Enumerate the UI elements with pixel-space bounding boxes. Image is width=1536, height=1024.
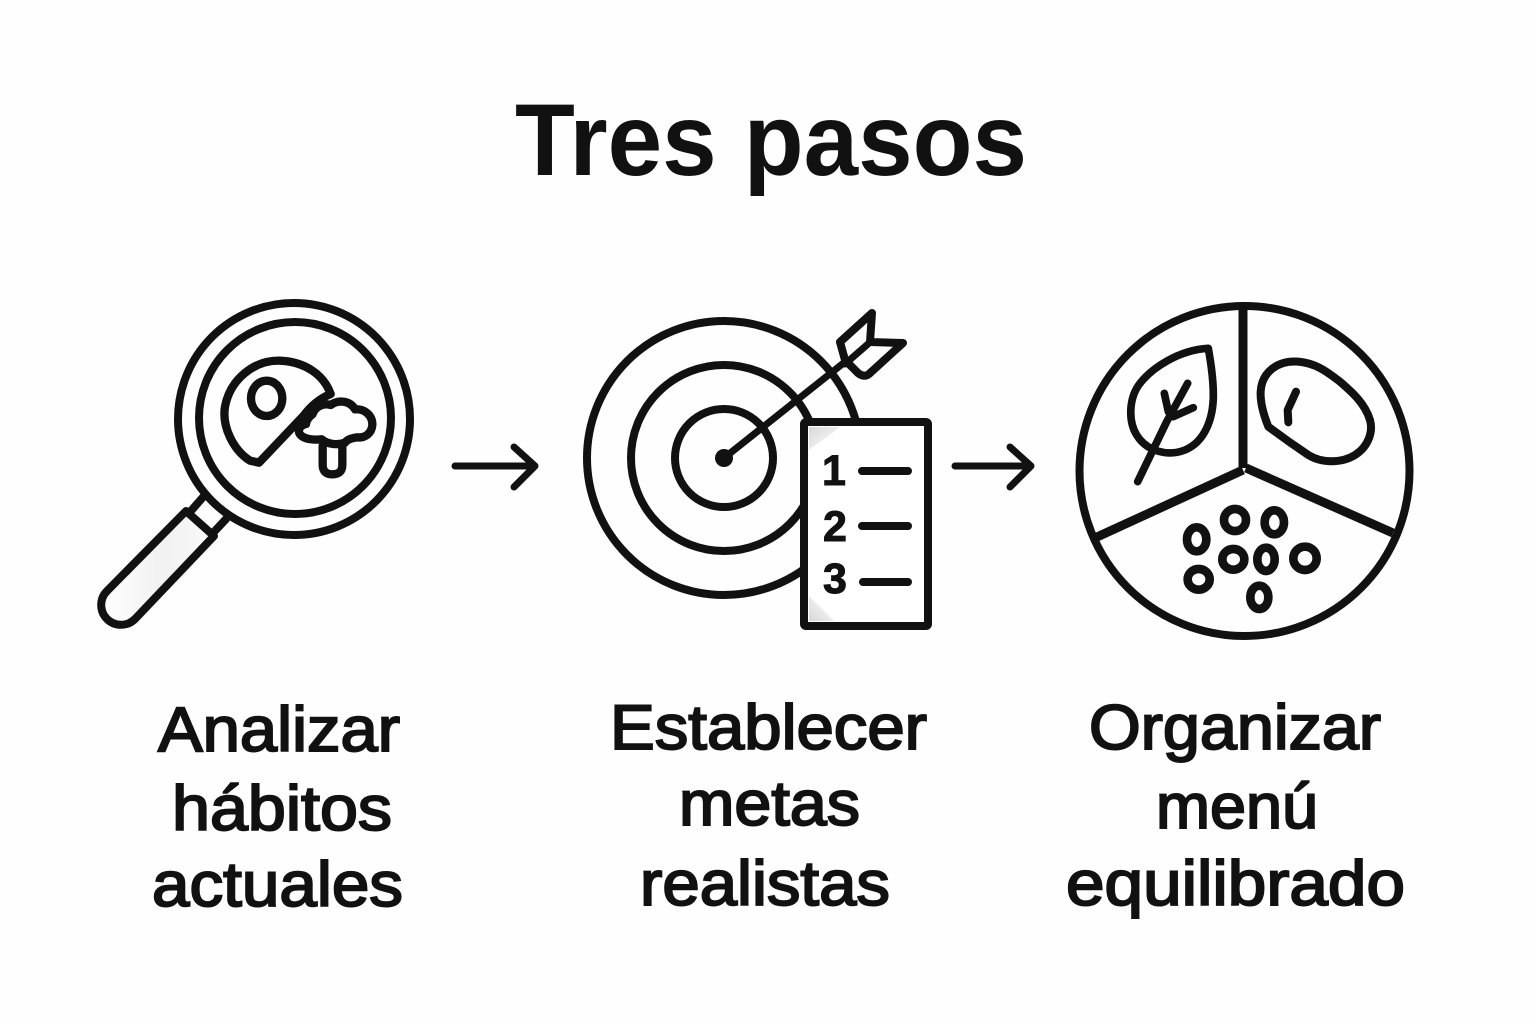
label: step 2: Establecer xyxy=(610,693,927,763)
arrow in target xyxy=(724,313,903,458)
checklist numbers: 2 xyxy=(823,503,847,551)
label: step 3: menú xyxy=(1156,772,1318,842)
label: step 3: equilibrado xyxy=(1066,849,1405,919)
icon: target with arrow xyxy=(587,313,928,626)
label: step 2 xyxy=(610,693,927,919)
label: step 1 xyxy=(152,695,403,920)
checklist numbers: 1 xyxy=(822,447,846,495)
checklist card xyxy=(804,422,928,626)
title: Tres pasos xyxy=(515,83,1027,197)
arrow: step 2 to step 3 xyxy=(955,447,1031,487)
food inside lens xyxy=(224,361,372,474)
label: step 1: hábitos xyxy=(172,774,392,844)
checklist numbers xyxy=(822,447,847,603)
label: step 2: realistas xyxy=(640,849,890,919)
lens rings xyxy=(178,303,410,535)
grains xyxy=(1187,509,1317,609)
magnifier handle xyxy=(101,496,227,625)
target rings xyxy=(587,321,861,595)
icon: magnifying glass over food xyxy=(101,303,410,625)
label: step 3: Organizar xyxy=(1089,693,1381,763)
plate outline and dividers xyxy=(1080,306,1410,636)
arrow: step 1 to step 2 xyxy=(455,447,535,487)
label: step 3 xyxy=(1066,693,1405,919)
leaf xyxy=(1131,348,1213,482)
label: step 1: Analizar xyxy=(158,695,400,765)
label: step 1: actuales xyxy=(152,850,403,920)
checklist numbers: 3 xyxy=(823,555,847,603)
label: step 2: metas xyxy=(679,769,860,839)
potato xyxy=(1261,362,1371,461)
icon: divided plate xyxy=(1080,306,1410,636)
